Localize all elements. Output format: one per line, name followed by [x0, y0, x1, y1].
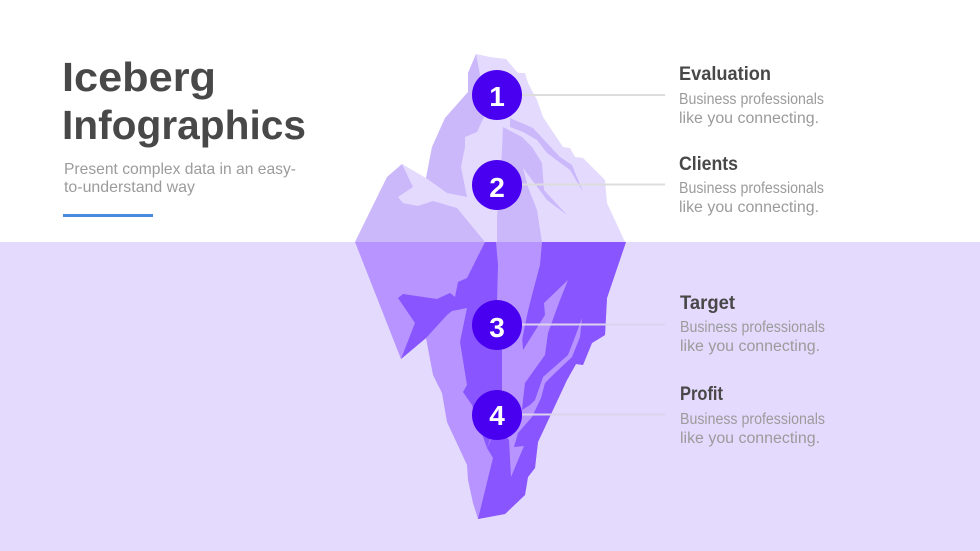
title: Infographics [62, 102, 306, 148]
title: Iceberg [62, 54, 216, 100]
iceberg below water [355, 242, 626, 519]
title [62, 54, 306, 148]
text block: Profit: Profit [680, 384, 724, 405]
marker 3 [472, 300, 522, 350]
marker 4 [472, 390, 522, 440]
marker 1: 1 [489, 81, 505, 112]
text block: Profit [680, 384, 825, 447]
text block: Clients: like you connecting. [679, 199, 819, 216]
marker 3: 3 [489, 312, 505, 343]
text block: Target: Business professionals [680, 319, 825, 336]
blue accent line [63, 214, 153, 217]
marker 2 [472, 160, 522, 210]
text block: Target: Target [680, 293, 736, 314]
marker 4: 4 [489, 400, 505, 431]
subtitle: to-understand way [64, 179, 195, 196]
text block: Evaluation: Evaluation [679, 64, 771, 85]
leader line 4 [520, 414, 665, 416]
marker 2: 2 [489, 172, 505, 203]
text block: Clients: Clients [679, 154, 738, 175]
iceberg illustration [355, 54, 626, 519]
subtitle [64, 161, 296, 196]
text block: Target: like you connecting. [680, 338, 820, 355]
text block: Clients: Business professionals [679, 180, 824, 197]
leader line 2 [520, 184, 665, 186]
marker 1 [472, 70, 522, 120]
text block: Evaluation: Business professionals [679, 91, 824, 108]
text block: Evaluation: like you connecting. [679, 110, 819, 127]
subtitle: Present complex data in an easy- [64, 161, 296, 178]
text block: Profit: like you connecting. [680, 430, 820, 447]
iceberg above water [355, 54, 625, 242]
text block: Evaluation [679, 64, 824, 127]
text block: Target [680, 293, 825, 355]
leader line 3 [520, 324, 665, 326]
text block: Profit: Business professionals [680, 411, 825, 428]
text block: Clients [679, 154, 824, 216]
water background [0, 242, 980, 551]
leader line 1 [520, 94, 665, 96]
